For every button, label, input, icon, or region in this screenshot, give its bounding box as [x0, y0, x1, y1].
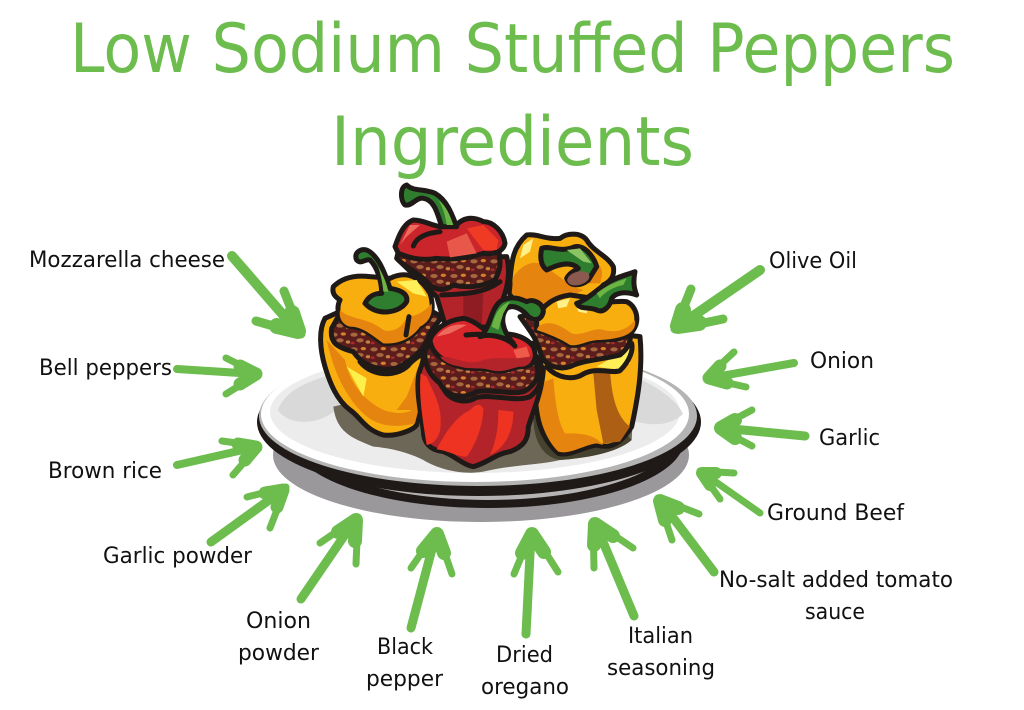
label: Italian seasoning: seasoning: [607, 656, 715, 681]
title: [70, 10, 955, 182]
label: Ground Beef: Ground Beef: [767, 501, 905, 526]
stem: [577, 272, 637, 311]
label: Brown rice: Brown rice: [48, 459, 162, 484]
arrow: Onion: [706, 352, 794, 387]
arrow: Italian seasoning: [593, 521, 634, 616]
arrow: Ground Beef: [700, 471, 760, 513]
label: Onion powder: powder: [238, 641, 320, 666]
label: No-salt added tomato sauce: [719, 568, 953, 625]
title: Low Sodium Stuffed Peppers: [70, 10, 955, 89]
arrow: Black pepper: [411, 531, 452, 628]
illustration: plate of stuffed peppers: [257, 185, 701, 522]
arrow: Bell peppers: [177, 358, 258, 394]
arrow: Onion powder: [301, 517, 358, 599]
label: Garlic powder: Garlic powder: [103, 544, 253, 569]
arrow: Mozzarella cheese: [232, 256, 301, 334]
pepper: back red: [395, 185, 509, 330]
stem: [480, 298, 543, 343]
stem: [401, 185, 457, 227]
label: No-salt added tomato sauce: No-salt added tomato: [719, 568, 953, 593]
label: Mozzarella cheese: Mozzarella cheese: [29, 248, 225, 273]
label: Garlic: Garlic: [819, 426, 880, 451]
label: Olive Oil: Olive Oil: [769, 249, 857, 274]
arrow: Brown rice: [177, 441, 258, 475]
stem: [541, 247, 597, 285]
arrow: Olive Oil: [675, 270, 760, 329]
label: Onion powder: [238, 609, 320, 666]
label: Onion powder: Onion: [246, 609, 311, 634]
arrow: Garlic: [718, 410, 805, 446]
plate: [257, 346, 701, 522]
pepper: left yellow: [321, 250, 442, 435]
label: Onion: Onion: [810, 349, 874, 374]
pepper: right yellow: [520, 272, 641, 454]
label: Black pepper: pepper: [366, 667, 444, 692]
label: Dried oregano: oregano: [481, 675, 569, 700]
arrow: No-salt added tomato sauce: [658, 498, 714, 572]
shadow under peppers: [333, 370, 633, 473]
label: No-salt added tomato sauce: sauce: [805, 600, 865, 625]
label: Black pepper: [366, 635, 444, 692]
label: Italian seasoning: Italian: [628, 624, 693, 649]
pepper: front red: [418, 298, 543, 467]
title: Ingredients: [331, 103, 694, 182]
label: Dried oregano: Dried: [496, 643, 553, 668]
label: Dried oregano: [481, 643, 569, 700]
label: Italian seasoning: [607, 624, 715, 681]
label: Black pepper: Black: [377, 635, 433, 660]
arrow: Garlic powder: [211, 487, 286, 542]
label: Bell peppers: Bell peppers: [39, 356, 172, 381]
arrow: Dried oregano: [514, 531, 558, 634]
pepper: back yellow: [510, 234, 614, 313]
stem: [356, 250, 407, 312]
